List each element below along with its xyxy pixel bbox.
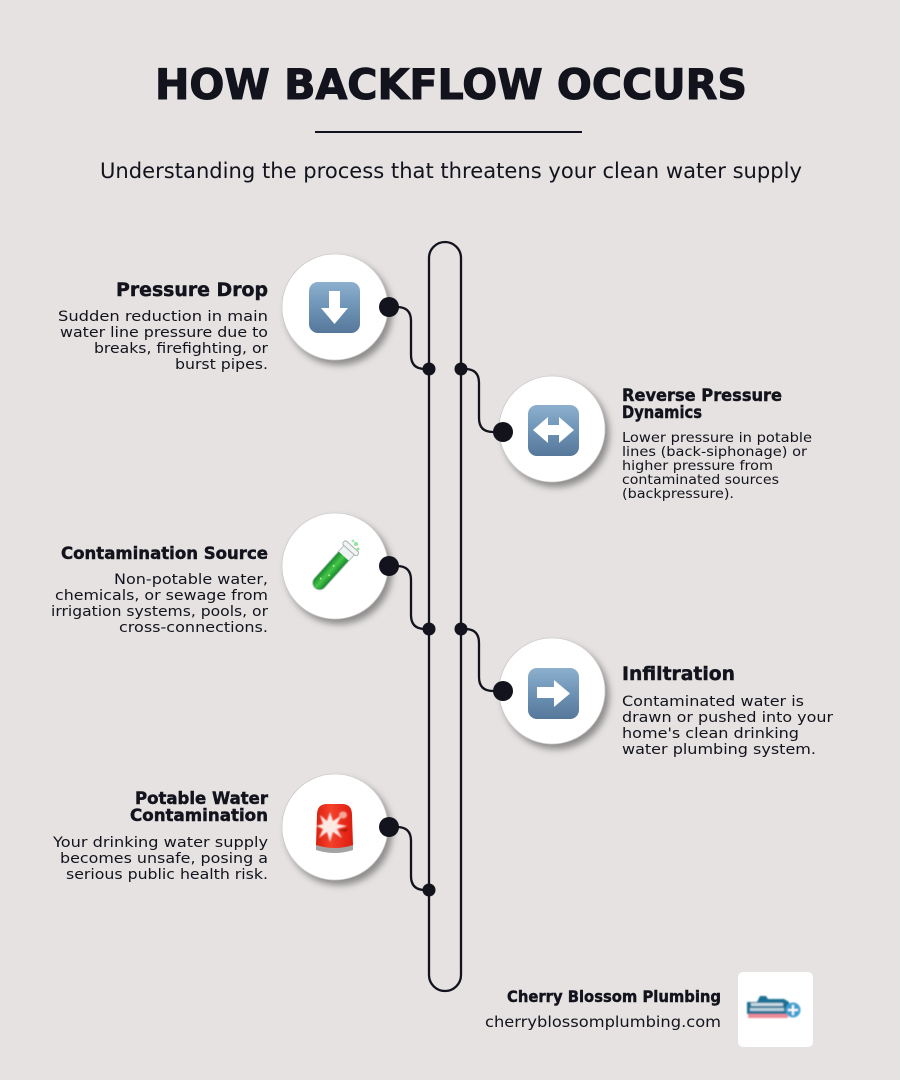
text: Pressure Drop description: burst pipes. — [175, 357, 268, 373]
icon: left-right arrow — [499, 376, 605, 482]
logo — [738, 972, 813, 1047]
subtitle: Understanding the process that threatens your clean water supply — [100, 159, 802, 183]
step: Infiltration — [493, 638, 833, 758]
footer: company name and website: Cherry Blossom Plumbing — [507, 987, 721, 1006]
text: Reverse Pressure Dynamics description: lines (back-siphonage) or — [622, 444, 807, 460]
node: Potable Water Contamination — [379, 817, 399, 837]
text: Contamination Source description: Non-potable water, — [114, 572, 268, 588]
text: Reverse Pressure Dynamics description: Lower pressure in potable — [622, 430, 812, 446]
text: Reverse Pressure Dynamics description: contaminated sources — [622, 472, 779, 488]
text: Infiltration description: water plumbing system. — [622, 742, 816, 758]
icon: test tube — [282, 513, 388, 619]
icon: down arrow — [282, 254, 388, 360]
text: Reverse Pressure Dynamics description: higher pressure from — [622, 458, 773, 474]
node: Reverse Pressure Dynamics — [493, 422, 513, 442]
heading: Infiltration: Infiltration — [622, 663, 735, 685]
heading: Reverse Pressure Dynamics: Dynamics — [622, 403, 702, 423]
heading: Contamination Source: Contamination Source — [61, 544, 268, 563]
text: Infiltration description: home's clean drinking — [622, 726, 799, 742]
heading: Potable Water Contamination — [130, 789, 269, 825]
text: Infiltration description: Contaminated water is — [622, 694, 804, 710]
text: Potable Water Contamination description: becomes unsafe, posing a — [60, 851, 268, 867]
text: Reverse Pressure Dynamics description: (backpressure). — [622, 486, 734, 502]
heading: Potable Water Contamination: Contamination — [130, 806, 268, 825]
central pipe diagram — [389, 242, 503, 991]
step: Pressure Drop — [58, 254, 399, 373]
node: Infiltration — [493, 681, 513, 701]
heading: Reverse Pressure Dynamics: Reverse Pressure — [622, 386, 782, 406]
icon: rotating light — [282, 774, 388, 880]
footer: company name and website: cherryblossomplumbing.com — [485, 1013, 721, 1031]
text: Infiltration description — [622, 694, 833, 758]
icon: right arrow — [499, 638, 605, 744]
text: Contamination Source description — [51, 572, 268, 636]
text: Pressure Drop description: water line pressure due to — [60, 325, 268, 341]
text: Reverse Pressure Dynamics description — [622, 430, 812, 502]
text: Potable Water Contamination description — [52, 835, 268, 883]
heading: Reverse Pressure Dynamics — [622, 386, 782, 423]
text: Pressure Drop description — [58, 309, 268, 373]
step: Potable Water Contamination — [52, 774, 399, 883]
node: Pressure Drop — [379, 297, 399, 317]
heading: Potable Water Contamination: Potable Water — [135, 789, 269, 808]
step: Contamination Source — [51, 513, 399, 636]
step: Reverse Pressure Dynamics — [493, 376, 812, 502]
text: Pressure Drop description: breaks, firefighting, or — [94, 341, 268, 357]
text: Pressure Drop description: Sudden reduction in main — [58, 309, 268, 325]
title: HOW BACKFLOW OCCURS — [155, 60, 747, 109]
node: Contamination Source — [379, 556, 399, 576]
text: Contamination Source description: chemicals, or sewage from — [55, 588, 268, 604]
text: Potable Water Contamination description: Your drinking water supply — [52, 835, 268, 851]
text: Potable Water Contamination description: serious public health risk. — [66, 867, 268, 883]
text: Contamination Source description: irrigation systems, pools, or — [51, 604, 268, 620]
text: Infiltration description: drawn or pushed into your — [622, 710, 833, 726]
footer: company name and website — [485, 987, 721, 1031]
heading: Pressure Drop: Pressure Drop — [116, 279, 268, 301]
text: Contamination Source description: cross-connections. — [119, 620, 268, 636]
